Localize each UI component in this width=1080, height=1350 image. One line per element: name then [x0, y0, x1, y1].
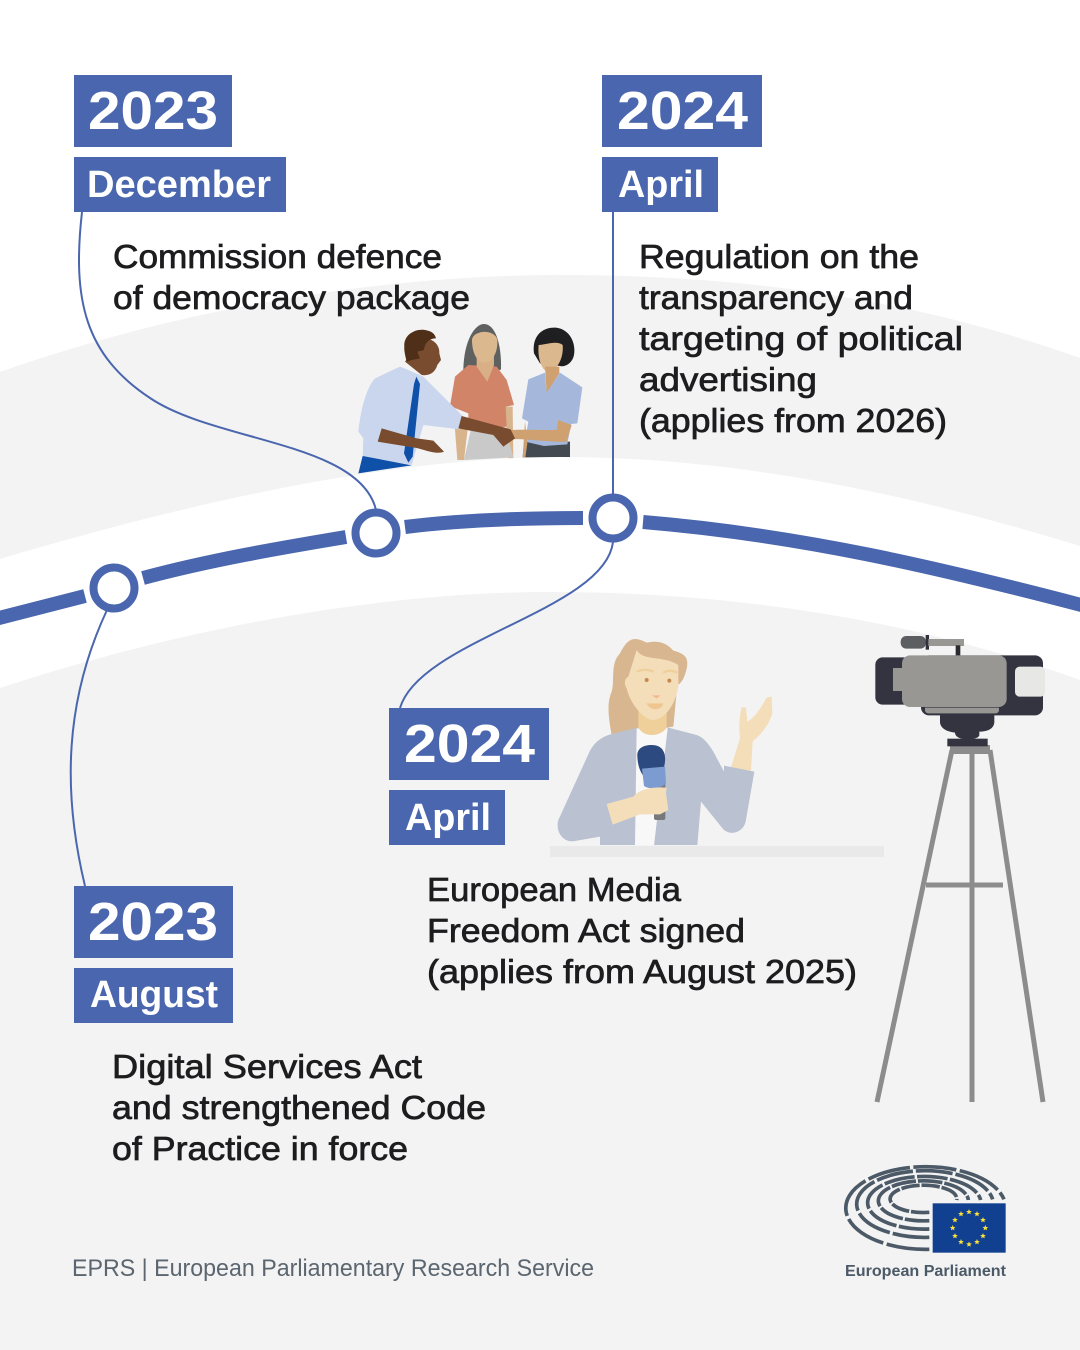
text: Commission defence of democracy package: Commission defence	[113, 238, 442, 275]
text: European Media Freedom Act: (applies from August 2025)	[427, 953, 857, 990]
date label: 2023 August: 2023	[88, 892, 218, 952]
date label: 2024 April top: 2024	[617, 81, 748, 141]
timeline marker: August 2023	[94, 568, 134, 608]
date label: 2024 April top: April	[618, 164, 704, 206]
date label: 2024 April lower: April	[405, 797, 491, 839]
text: Digital Services Act	[112, 1048, 486, 1167]
connector lines	[71, 212, 613, 886]
illustration: three people shaking hands	[358, 324, 582, 473]
logo: European Parliament	[845, 1167, 1007, 1280]
illustration: video camera on tripod	[875, 635, 1045, 1102]
footer source: EPRS | European Parliamentary Research Service	[72, 1255, 594, 1282]
date label: 2023 August: August	[90, 974, 218, 1016]
timeline marker: April 2024	[592, 498, 634, 538]
text: Regulation on political advertising: transparency and	[639, 279, 913, 316]
text: Regulation on political advertising: Regulation on the	[639, 238, 919, 275]
text: Regulation on political advertising: targeting of political	[639, 320, 963, 357]
text: Digital Services Act: Digital Services Act	[112, 1048, 422, 1085]
gray background	[0, 275, 1080, 1350]
reporter desk	[550, 846, 884, 857]
text: Regulation on political advertising: advertising	[639, 361, 817, 398]
white band	[0, 457, 1080, 688]
date label: 2023 December	[74, 75, 286, 212]
logo: European Parliament: European Parliament	[845, 1263, 1007, 1280]
text: European Media Freedom Act: Freedom Act signed	[427, 912, 745, 949]
timeline line	[0, 518, 1080, 619]
timeline marker: December 2023	[356, 512, 396, 554]
date label: 2023 December: 2023	[88, 81, 218, 141]
text: European Media Freedom Act: European Media	[427, 871, 682, 908]
text: Digital Services Act: and strengthened Code	[112, 1089, 486, 1126]
illustration: reporter with microphone	[558, 639, 772, 845]
text: Commission defence of democracy package: of democracy package	[113, 279, 470, 316]
date label: 2023 December: December	[87, 164, 271, 206]
text: Commission defence of democracy package	[113, 238, 470, 316]
date label: 2023 August	[74, 886, 233, 1023]
text: Digital Services Act: of Practice in force	[112, 1130, 408, 1167]
text: Regulation on political advertising: (applies from 2026)	[639, 402, 947, 439]
text: Regulation on political advertising	[639, 238, 963, 439]
text: European Media Freedom Act	[427, 871, 857, 990]
date label: 2024 April top	[602, 75, 762, 212]
date label: 2024 April lower: 2024	[404, 714, 535, 774]
date label: 2024 April lower	[389, 708, 549, 845]
